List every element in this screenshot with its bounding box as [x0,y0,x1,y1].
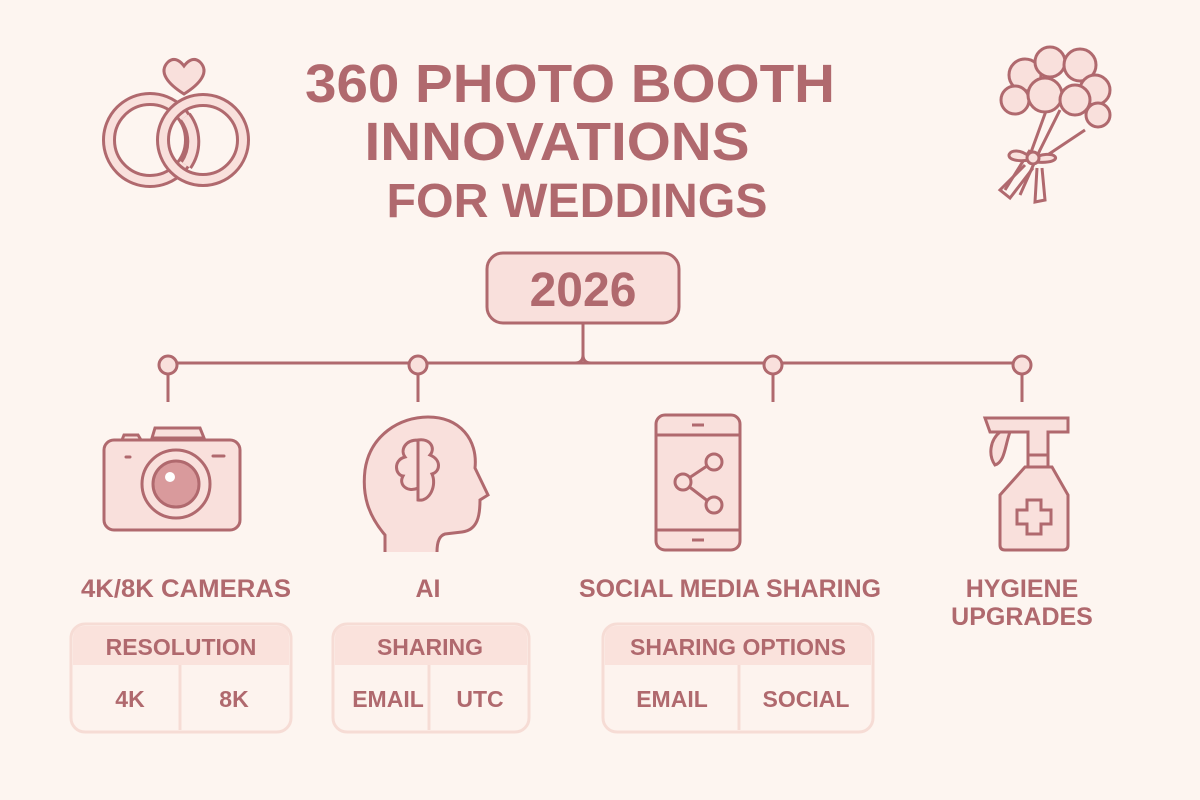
title: INNOVATIONS [364,112,750,172]
title [305,54,835,228]
table: sharing options [603,624,873,732]
icon: phone share [656,415,740,550]
icon: AI head [364,417,488,552]
table: sharing: SHARING [377,634,483,660]
table: sharing: EMAIL [352,686,424,712]
table: sharing: UTC [456,686,504,712]
table: sharing options: EMAIL [636,686,708,712]
year box [487,253,679,323]
icon: bouquet [1000,47,1110,202]
labels: 4K/8K CAMERAS [81,575,291,603]
labels: UPGRADES [951,603,1093,631]
title: 360 PHOTO BOOTH [305,54,835,114]
table: sharing options: SHARING OPTIONS [630,634,846,660]
labels [81,575,1093,631]
year box: 2026 [530,264,636,317]
timeline connector [159,323,1031,402]
labels: AI [416,575,440,603]
table: resolution: RESOLUTION [106,634,256,660]
icon: camera [104,428,240,530]
table: resolution [71,624,291,732]
table: resolution: 8K [219,686,249,712]
table: sharing options: SOCIAL [763,686,849,712]
table: sharing [333,624,529,732]
icon: wedding rings [109,59,243,181]
table: resolution: 4K [115,686,145,712]
labels: HYGIENE [966,575,1078,603]
labels: SOCIAL MEDIA SHARING [579,575,881,603]
title: FOR WEDDINGS [386,175,768,228]
icon: spray bottle [985,418,1068,550]
